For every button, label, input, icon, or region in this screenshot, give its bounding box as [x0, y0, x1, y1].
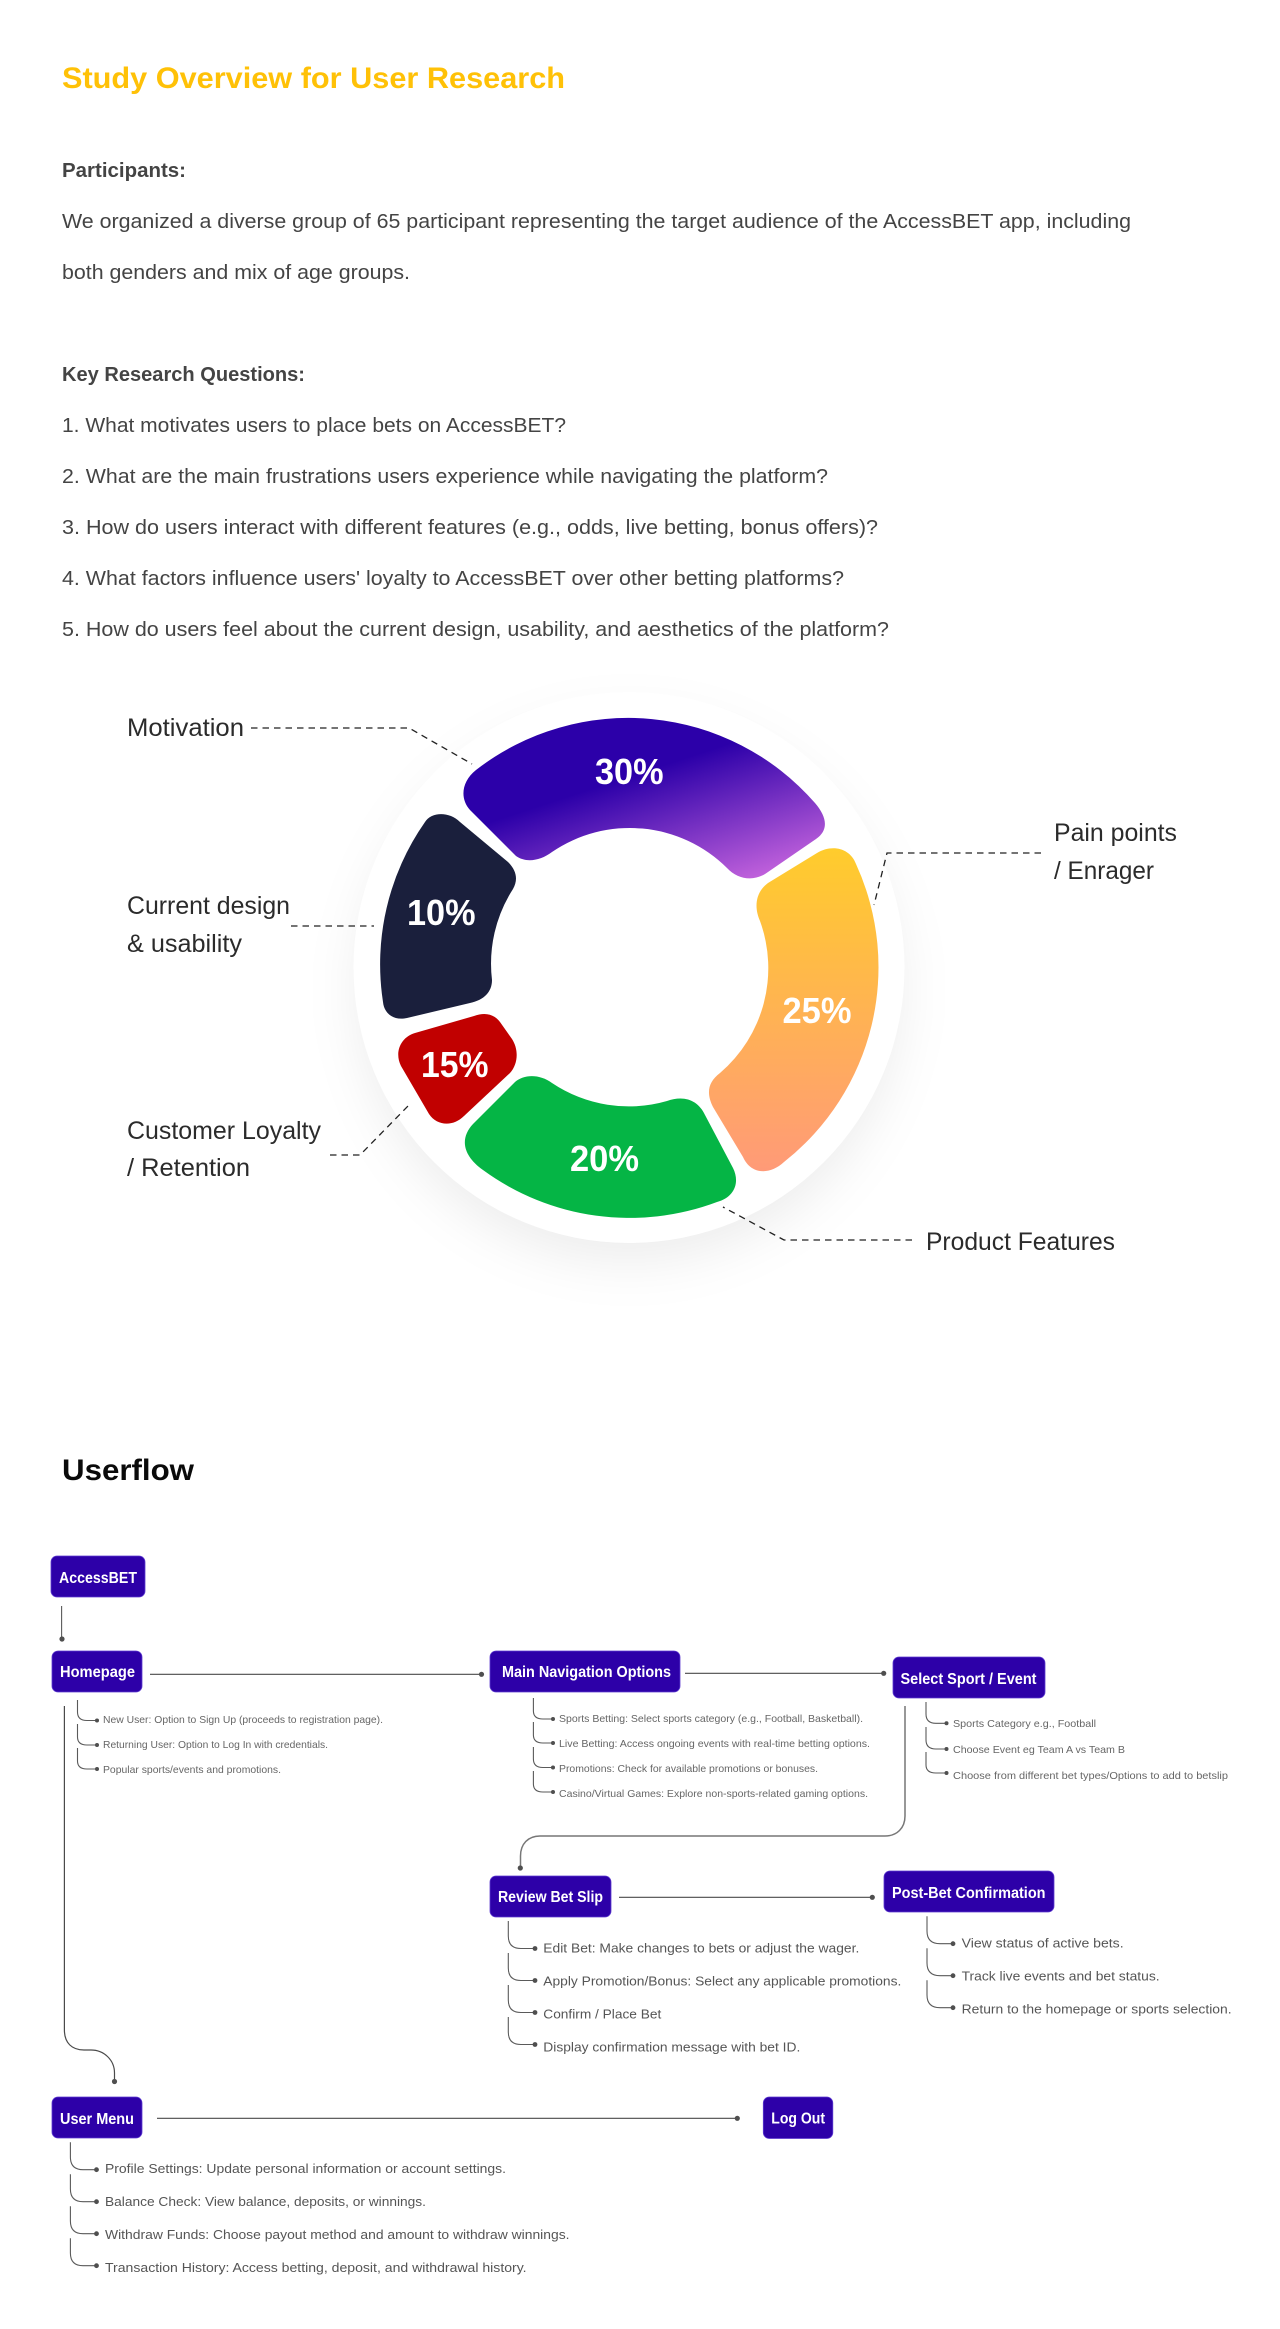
review bet slip sub-items: Confirm / Place Bet	[543, 2006, 662, 2022]
main navigation sub-items: Promotions: Check for available promotions or bonuses.	[559, 1763, 818, 1775]
arrow: user menu to log out	[157, 2116, 740, 2121]
text block: key research questions: 5. How do users feel about the current design, usability, and aesthetics of the platform?	[62, 619, 889, 641]
segment: product features 20%	[465, 1076, 736, 1218]
text block: key research questions: 3. How do users interact with different features (e.g., odds, live betting, bonus offers)?	[62, 517, 878, 539]
arrow: select sport to review bet slip	[518, 1706, 905, 1871]
text block: participants: Participants:	[62, 160, 186, 182]
text block: key research questions: 4. What factors influence users' loyalty to AccessBET over other betting platforms?	[62, 568, 844, 590]
flow node: main navigation options	[490, 1651, 680, 1692]
select sport sub-items: Choose Event eg Team A vs Team B	[953, 1744, 1125, 1756]
arrow: AccessBET to homepage	[59, 1606, 65, 1642]
user menu sub-items: Transaction History: Access betting, deposit, and withdrawal history.	[105, 2260, 527, 2275]
review bet slip sub-items: Edit Bet: Make changes to bets or adjust the wager.	[543, 1940, 859, 1956]
text block: participants: both genders and mix of age groups.	[62, 262, 410, 284]
percentage values: 10%	[407, 892, 476, 933]
callout: customer loyalty and retention	[127, 1105, 409, 1182]
select sport sub-items: Choose from different bet types/Options to add to betslip	[953, 1770, 1228, 1782]
main navigation sub-items: Sports Betting: Select sports category (e.g., Football, Basketball).	[559, 1713, 863, 1725]
user menu sub-items: Balance Check: View balance, deposits, or winnings.	[105, 2194, 426, 2209]
homepage sub-items	[78, 1700, 383, 1776]
flow node: post-bet confirmation: Post-Bet Confirmation	[892, 1885, 1046, 1902]
callout: motivation: Motivation	[127, 714, 244, 742]
arrow: homepage to main navigation	[150, 1672, 484, 1677]
flow node: log out: Log Out	[771, 2110, 825, 2128]
review bet slip sub-items	[508, 1921, 901, 2054]
flow node: post-bet confirmation	[884, 1871, 1054, 1912]
homepage sub-items: New User: Option to Sign Up (proceeds to registration page).	[103, 1714, 383, 1726]
flow node: select sport or event: Select Sport / Event	[900, 1671, 1036, 1688]
callout: product features: Product Features	[926, 1228, 1115, 1256]
percentage values: 30%	[595, 751, 664, 792]
arrow: homepage to user menu	[64, 1706, 117, 2084]
flow node: log out	[763, 2097, 833, 2138]
callout: pain points and enrager: Pain points	[1054, 819, 1177, 847]
homepage sub-items: Returning User: Option to Log In with credentials.	[103, 1739, 328, 1751]
donut chart	[127, 692, 1177, 1262]
segment: customer loyalty 15%	[398, 1014, 517, 1124]
segment: current design 10%	[380, 814, 516, 1019]
text block: key research questions: 1. What motivates users to place bets on AccessBET?	[62, 415, 566, 437]
flow node: AccessBET: AccessBET	[59, 1570, 137, 1587]
percentage values	[407, 751, 852, 1179]
main navigation sub-items: Casino/Virtual Games: Explore non-sports-related gaming options.	[559, 1788, 868, 1800]
flow node: main navigation options: Main Navigation Options	[502, 1664, 671, 1681]
post-bet confirmation sub-items	[927, 1916, 1232, 2016]
main navigation sub-items	[533, 1698, 870, 1800]
arrow: review bet slip to post-bet confirmation	[619, 1895, 875, 1900]
text block: key research questions: 2. What are the main frustrations users experience while navigating the platform?	[62, 466, 828, 488]
callout: current design and usability	[127, 892, 374, 958]
callout: pain points and enrager	[874, 819, 1177, 905]
main navigation sub-items: Live Betting: Access ongoing events with real-time betting options.	[559, 1738, 870, 1750]
title: study overview: Study Overview for User Research	[62, 62, 565, 95]
user menu sub-items: Profile Settings: Update personal information or account settings.	[105, 2161, 506, 2176]
flow node: user menu: User Menu	[60, 2111, 134, 2128]
callout: current design and usability: Current design	[127, 892, 290, 920]
post-bet confirmation sub-items: Track live events and bet status.	[962, 1968, 1160, 1984]
flow node: homepage: Homepage	[60, 1664, 135, 1681]
percentage values: 15%	[421, 1044, 488, 1085]
text block: participants	[62, 160, 1131, 284]
select sport sub-items	[926, 1702, 1228, 1782]
callout: customer loyalty and retention: Customer Loyalty	[127, 1117, 321, 1145]
text block: key research questions	[62, 364, 889, 641]
callout: current design and usability: & usability	[127, 930, 242, 958]
select sport sub-items: Sports Category e.g., Football	[953, 1718, 1096, 1730]
flow node: select sport or event	[893, 1657, 1045, 1698]
callout: customer loyalty and retention: / Retention	[127, 1154, 250, 1182]
callout: motivation	[127, 714, 472, 764]
post-bet confirmation sub-items: View status of active bets.	[962, 1936, 1124, 1950]
review bet slip sub-items: Display confirmation message with bet ID.	[543, 2040, 800, 2054]
flow node: review bet slip: Review Bet Slip	[498, 1889, 603, 1906]
post-bet confirmation sub-items: Return to the homepage or sports selection.	[962, 2002, 1232, 2016]
segment: motivation 30%	[463, 718, 825, 878]
user menu sub-items: Withdraw Funds: Choose payout method and amount to withdraw winnings.	[105, 2227, 570, 2242]
arrow: main navigation to select sport	[685, 1671, 886, 1676]
heading: userflow: Userflow	[62, 1454, 195, 1487]
flow node: review bet slip	[490, 1876, 611, 1917]
callout: pain points and enrager: / Enrager	[1054, 857, 1154, 885]
user menu sub-items	[70, 2142, 570, 2275]
flow node: homepage	[52, 1651, 142, 1692]
segment: pain points 25%	[709, 848, 878, 1171]
callout: product features	[723, 1207, 1115, 1256]
text block: participants: We organized a diverse group of 65 participant representing the target audience of the AccessBET app, including	[62, 211, 1131, 233]
chart backdrop circle	[354, 692, 904, 1262]
review bet slip sub-items: Apply Promotion/Bonus: Select any applicable promotions.	[543, 1974, 901, 1988]
flow node: user menu	[52, 2097, 142, 2138]
text block: key research questions: Key Research Questions:	[62, 364, 305, 386]
flow node: AccessBET	[51, 1556, 145, 1597]
percentage values: 25%	[782, 990, 852, 1031]
percentage values: 20%	[570, 1138, 639, 1179]
homepage sub-items: Popular sports/events and promotions.	[103, 1764, 281, 1776]
